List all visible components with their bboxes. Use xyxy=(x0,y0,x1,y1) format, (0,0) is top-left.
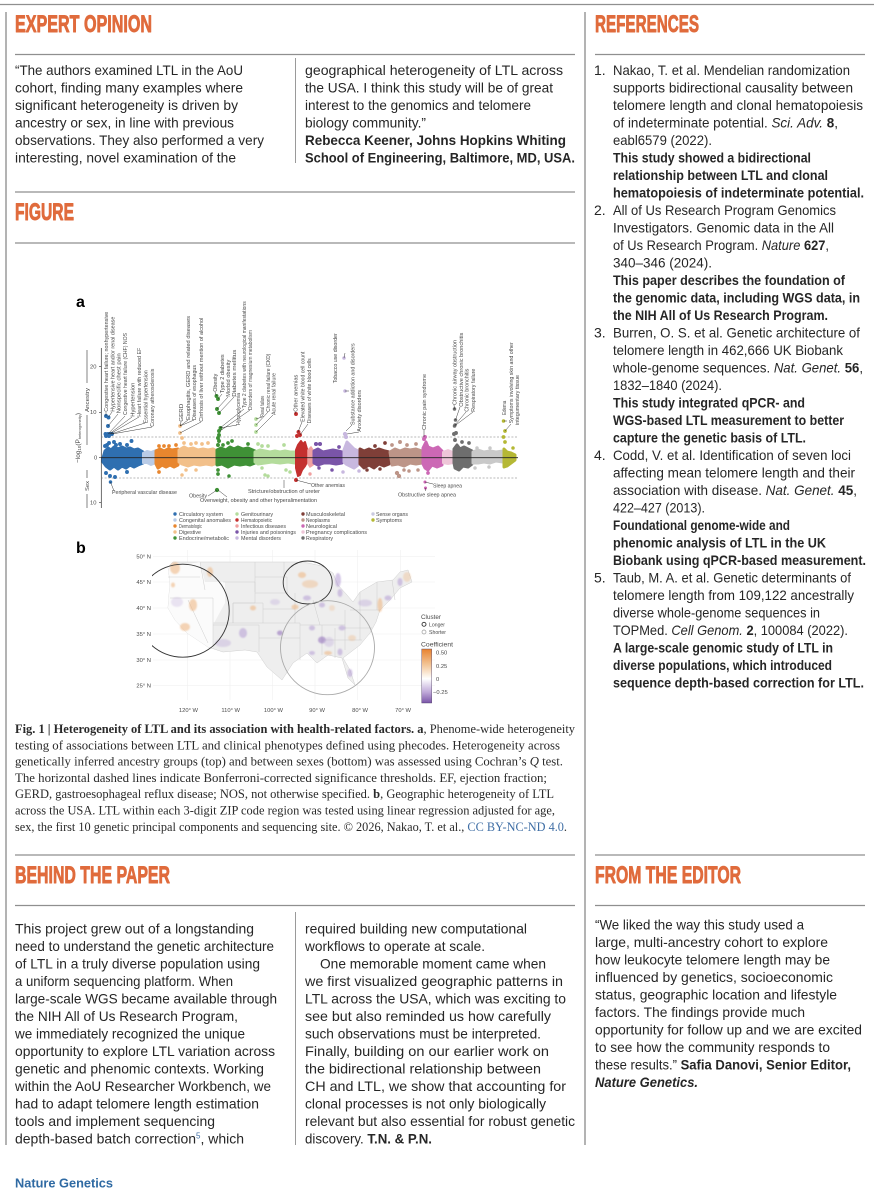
latitude and longitude labels: 90° W xyxy=(309,708,326,714)
text block: behind the paper body: One memorable moment came when xyxy=(320,956,546,972)
panel: from the editor xyxy=(595,855,865,1090)
endocrine points xyxy=(215,394,255,492)
y axis: 10 xyxy=(90,501,96,507)
figure caption: genetically inferred ancestry groups (top) and between sexes (bottom) was assessed using Cochran’s Q test. xyxy=(15,755,563,769)
y axis: Sex xyxy=(85,481,91,491)
reference list: Nakao, T. et al. Mendelian randomization xyxy=(613,62,850,78)
text block: editor quote: large, multi-ancestry cohort to explore xyxy=(595,934,828,950)
rotated phenotype labels: Other anemias xyxy=(294,375,300,412)
rotated phenotype labels: Diabetes mellitus xyxy=(232,350,238,397)
mental disorder points xyxy=(342,357,360,473)
text block: editor quote: factors. The findings provide much xyxy=(595,1004,805,1020)
text block: behind the paper body: clonal processes is not only biologically xyxy=(305,1096,546,1112)
lower phenotype labels: Obstructive sleep apnea xyxy=(398,492,457,498)
text block: expert quote: cohort, finding many examples where xyxy=(15,80,243,96)
legend: phecode categories: Hematopoietic xyxy=(241,518,272,524)
text block: behind the paper body: 5 xyxy=(196,1132,201,1140)
latitude and longitude labels: 100° W xyxy=(264,708,284,714)
latitude and longitude labels: 30° N xyxy=(136,658,151,664)
digestive points xyxy=(178,424,217,476)
text block: editor quote xyxy=(595,916,862,1090)
legend: phecode categories: Neoplasms xyxy=(306,518,330,524)
rotated phenotype labels: Disorders of magnesium metabolism xyxy=(248,330,254,410)
text block: behind the paper body: required building new computational xyxy=(305,920,527,936)
latitude and longitude labels: 50° N xyxy=(136,555,151,561)
legend: cluster: Longer xyxy=(429,622,445,628)
reference list: Taub, M. A. et al. Genetic determinants of xyxy=(613,570,851,586)
reference list: affecting mean telomere length and their xyxy=(613,464,855,480)
rotated phenotype labels: Chronic renal failure (CKD) xyxy=(266,354,272,412)
reference list: Codd, V. et al. Identification of seven loci xyxy=(613,447,851,463)
text block: behind the paper body: large-scale WGS became available through xyxy=(15,990,277,1006)
zero baseline xyxy=(101,457,518,459)
text block: expert quote: Rebecca Keener, Johns Hopkins Whiting xyxy=(305,132,566,148)
rotated phenotype labels: Respiratory failure xyxy=(471,369,477,412)
reference list: eabl6579 (2022). xyxy=(613,132,712,148)
text block: behind the paper body: opportunity to explore LTL variation across xyxy=(15,1043,275,1059)
legend: phecode categories: Neurological xyxy=(306,524,337,530)
lower phenotype labels: Obesity xyxy=(189,494,207,500)
text block: editor quote: opportunity for follow up and we are excited xyxy=(595,1022,862,1038)
reference list: Investigators. Genomic data in the All xyxy=(613,220,834,236)
rotated phenotype labels: Esophagitis, GERD and related diseases xyxy=(186,316,192,420)
reference list: relationship between LTL and clonal xyxy=(613,167,828,183)
rotated phenotype labels: Hypertensive heart and/or renal disease xyxy=(110,317,116,412)
musculoskeletal points xyxy=(360,442,389,471)
text block: expert quote: interest to the genomics and telomere xyxy=(305,97,531,113)
circulatory points xyxy=(103,414,143,483)
figure caption: across the USA. LTL within each 3-digit ZIP code region was tested using linear regression adjusted for age, xyxy=(15,804,555,818)
rotated phenotype labels xyxy=(104,301,521,432)
text block: expert quote: the USA. I think this study will be of great xyxy=(305,80,553,96)
reference list: phenomic analysis of LTL in the UK xyxy=(613,534,826,550)
text block: expert quote: interesting, novel examination of the xyxy=(15,150,236,166)
rotated phenotype labels: Type 2 diabetes with neurological manifestations xyxy=(242,301,248,408)
text block: editor quote: status, geographic location and lifestyle xyxy=(595,986,837,1002)
reference list: Burren, O. S. et al. Genetic architecture of xyxy=(613,324,860,340)
text block: behind the paper body: the bidirectional relationship between xyxy=(305,1060,541,1076)
reference list: 2. xyxy=(594,202,606,218)
y axis: 20 xyxy=(90,365,96,371)
coefficient patches xyxy=(170,562,411,677)
text block: behind the paper body: we immediately recognized the unique xyxy=(14,1026,245,1042)
heading: from the editor: FROM THE EDITOR xyxy=(595,862,741,889)
latitude and longitude labels: 120° W xyxy=(179,708,199,714)
text block: behind the paper body: within the AoU Researcher Workbench, we xyxy=(14,1078,271,1094)
lower phenotype labels: Peripheral vascular disease xyxy=(112,490,177,496)
rotated phenotype labels: Diseases of esophagus xyxy=(192,365,198,420)
legend: phecode categories: Injuries and poisonings xyxy=(241,530,296,536)
text block: editor quote: “We liked the way this study used a xyxy=(595,916,804,932)
reference list: association with disease. Nat. Genet. 45, xyxy=(613,482,857,498)
text block: behind the paper body: LTL across the USA, which was exciting to xyxy=(305,990,566,1006)
text block: expert quote: biology community.” xyxy=(305,114,426,130)
legend: phecode categories: Dermatologic xyxy=(179,524,202,530)
hematopoietic points xyxy=(294,412,307,482)
y axis xyxy=(75,348,101,508)
text block: behind the paper body: see but also reminded us how carefully xyxy=(305,1008,551,1024)
rotated phenotype labels: Congestive heart failure; nonhypertensive xyxy=(104,312,110,412)
latitude and longitude labels: 25° N xyxy=(136,684,151,690)
text block: editor quote: how leukocyte telomere length may be xyxy=(595,952,830,968)
lower phenotype labels: Sleep apnea xyxy=(433,484,463,490)
text block: behind the paper body: Finally, building on our earlier work on xyxy=(305,1043,549,1059)
y axis: 0 xyxy=(94,456,97,462)
text block: behind the paper body: This project grew out of a longstanding xyxy=(15,920,254,936)
map grid xyxy=(153,550,435,700)
text block: expert quote: ancestry or sex, in line with previous xyxy=(15,114,234,130)
legend: coefficient colour bar: Coefficient xyxy=(421,641,453,648)
heading: expert opinion: EXPERT OPINION xyxy=(15,11,152,38)
figure caption: Fig. 1 | Heterogeneity of LTL and its association with health-related factors. a, Phenome-wide heterogeneity xyxy=(15,722,576,736)
latitude and longitude labels: 80° W xyxy=(352,708,369,714)
text block: behind the paper body: the NIH All of Us Research Program, xyxy=(15,1008,238,1024)
reference list: diverse whole-genome sequences in xyxy=(613,604,820,620)
legend: phecode categories: Genitourinary xyxy=(241,512,273,518)
rotated phenotype labels: Anxiety disorders xyxy=(357,390,363,432)
y axis: −log xyxy=(75,451,82,463)
reference list: whole-genome sequences. Nat. Genet. 56, xyxy=(612,360,863,376)
state borders xyxy=(168,562,395,660)
text block: behind the paper body: genetic and phenomic contexts. Working xyxy=(15,1060,264,1076)
lower phenotype labels: Overweight, obesity and other hyperalimentation xyxy=(200,498,317,504)
legend: phecode categories: Sense organs xyxy=(376,512,408,518)
rotated phenotype labels: Coronary atherosclerosis xyxy=(150,369,156,427)
text block: behind the paper body: tools and implement sequencing xyxy=(15,1113,215,1129)
injuries points xyxy=(314,442,342,471)
rotated phenotype labels: Hypoglycemia xyxy=(236,392,242,425)
reference list: of indeterminate potential. Sci. Adv. 8, xyxy=(613,114,838,130)
reference list: capture the genetic basis of LTL. xyxy=(613,430,806,446)
legend: coefficient colour bar: −0.25 xyxy=(433,690,448,696)
cluster circles xyxy=(136,561,374,695)
rotated phenotype labels: Hypertension xyxy=(130,383,136,417)
heading: figure: FIGURE xyxy=(15,199,74,226)
reference list: A large-scale genomic study of LTL in xyxy=(613,640,833,656)
legend: phecode categories: Respiratory xyxy=(306,536,333,542)
map of contiguous USA xyxy=(168,562,412,685)
latitude and longitude labels: 40° N xyxy=(136,606,151,612)
threshold dashed lines xyxy=(101,437,518,478)
rotated phenotype labels: Essential hypertension xyxy=(143,370,149,423)
panel letter a: a xyxy=(76,294,85,311)
rotated phenotype labels: Substance addiction and disorders xyxy=(350,343,356,425)
rotated phenotype labels: integumentary tissue xyxy=(515,375,521,425)
y axis: Ancestry xyxy=(85,388,91,412)
rotated phenotype labels: Obesity xyxy=(213,374,219,392)
text block: expert quote xyxy=(15,62,575,166)
reference list: telomere length and clonal hematopoiesis xyxy=(613,97,863,113)
legend: coefficient colour bar xyxy=(421,641,453,703)
text block: behind the paper body: of LTL in a truly diverse population using xyxy=(15,956,260,972)
legend: coefficient colour bar: 0 xyxy=(436,677,439,683)
figure caption: testing of associations between LTL and clinical phenotypes defined using phecodes. Heterogeneity across xyxy=(15,738,560,752)
y axis: 10 xyxy=(90,410,96,416)
text block: behind the paper body: relevant but also essential for robust genetic xyxy=(305,1113,575,1129)
reference list: the NIH All of Us Research Program. xyxy=(613,307,828,323)
reference list: 340–346 (2024). xyxy=(613,254,712,270)
legend: coefficient colour bar: 0.50 xyxy=(436,650,447,656)
latitude and longitude labels: 110° W xyxy=(221,708,241,714)
legend: phecode categories xyxy=(173,512,408,542)
rotated phenotype labels: Symptoms involving skin and other xyxy=(509,342,515,423)
pregnancy points xyxy=(443,450,453,464)
rotated phenotype labels: Cirrhosis of liver without mention of alcohol xyxy=(199,318,205,422)
text block: behind the paper body xyxy=(14,920,575,1146)
reference list: supports bidirectional causality between xyxy=(613,80,853,96)
text block: expert quote: School of Engineering, Baltimore, MD, USA. xyxy=(305,150,575,166)
symptom points xyxy=(502,420,515,467)
footer: journal name: Nature Genetics xyxy=(15,1176,113,1190)
text block: behind the paper body: had to adapt telomere length estimation xyxy=(15,1096,259,1112)
text block: editor quote: to see how the community responds to xyxy=(595,1039,830,1055)
rotated phenotype labels: Nonspecific chest pain xyxy=(116,353,122,413)
text block: editor quote: influenced by genetics, socioeconomic xyxy=(595,969,833,985)
reference list: All of Us Research Program Genomics xyxy=(613,202,836,218)
text block: expert quote: observations. They also performed a very xyxy=(15,132,264,148)
infectious points xyxy=(308,447,313,467)
text block: behind the paper body: such observations must be interpreted. xyxy=(305,1026,541,1042)
text block: behind the paper body: we first visualized geographic patterns in xyxy=(304,973,563,989)
rotated phenotype labels: Chronic airway obstruction xyxy=(452,340,458,405)
rotated phenotype labels: Acute renal failure xyxy=(271,373,277,415)
reference list: telomere length in 462,666 UK Biobank xyxy=(613,342,844,358)
legend: cluster: Shorter xyxy=(429,630,446,636)
panel: figure a, phenome-wide Manhattan plot xyxy=(75,294,521,542)
reference list: diverse populations, which introduced xyxy=(613,657,832,673)
legend: phecode categories: Musculoskeletal xyxy=(306,512,345,518)
reference list: 5. xyxy=(594,570,606,586)
text block: expert quote: “The authors examined LTL in the AoU xyxy=(15,62,243,78)
legend: cluster: Cluster xyxy=(421,614,441,621)
figure caption: GERD, gastroesophageal reflux disease; NOS, not otherwise specified. b, Geographic heterogeneity of LTL xyxy=(15,787,554,801)
rotated phenotype labels: Type 2 diabetes xyxy=(220,354,226,393)
y axis: 10 xyxy=(77,445,82,451)
lower phenotype labels: Other anemias xyxy=(311,483,345,489)
text block: behind the paper body: CH and LTL, we show that accounting for xyxy=(305,1078,566,1094)
legend: coefficient colour bar: 0.25 xyxy=(436,664,447,670)
lower phenotype labels: Stricture/obstruction of ureter xyxy=(248,489,320,495)
sense organ points xyxy=(473,447,503,469)
reference list xyxy=(594,62,866,690)
heading: behind the paper: BEHIND THE PAPER xyxy=(15,862,170,889)
text block: expert quote: geographical heterogeneity of LTL across xyxy=(305,62,563,78)
rotated phenotype labels: GERD xyxy=(179,404,185,422)
panel: references xyxy=(594,11,866,690)
latitude and longitude labels: 70° W xyxy=(395,708,412,714)
legend: phecode categories: Congenital anomalies xyxy=(179,518,231,524)
latitude and longitude labels xyxy=(136,555,412,714)
panel: behind the paper xyxy=(14,855,575,1146)
reference list: of Us Research Program. Nature 627, xyxy=(613,237,829,253)
rotated phenotype labels: Chronic pain syndrome xyxy=(422,374,428,430)
legend: phecode categories: Mental disorders xyxy=(241,536,281,542)
text block: behind the paper body: depth-based batch correction xyxy=(15,1130,196,1146)
latitude and longitude labels: 45° N xyxy=(136,580,151,586)
legend: phecode categories: Symptoms xyxy=(376,518,402,524)
legend: phecode categories: Pregnancy complications xyxy=(306,530,367,536)
lower phenotype labels xyxy=(112,483,463,504)
reference list: WGS-based LTL measurement to better xyxy=(613,412,844,428)
legend: cluster xyxy=(421,614,446,636)
reference list: 3. xyxy=(594,324,606,340)
text block: editor quote: Nature Genetics. xyxy=(595,1074,698,1090)
reference list: This study showed a bidirectional xyxy=(613,150,811,166)
rotated phenotype labels: Elevated white blood cell count xyxy=(300,351,306,422)
panel: expert opinion xyxy=(15,11,575,166)
rotated phenotype labels: Congestive heart failure (CHF) NOS xyxy=(123,333,129,415)
panel letter b: b xyxy=(76,540,86,557)
panel: figure b, USA map xyxy=(76,540,453,714)
rotated phenotype labels: Heart failure with reduced EF xyxy=(137,347,143,417)
text block: behind the paper body: , which xyxy=(200,1130,244,1146)
rotated phenotype labels: Chronic bronchitis xyxy=(464,369,470,412)
reference list: 1832–1840 (2024). xyxy=(613,377,722,393)
figure caption: The horizontal dashed lines indicate Bonferroni-corrected significance thresholds. EF, ejection fraction; xyxy=(15,771,547,785)
heading: references: REFERENCES xyxy=(595,11,699,38)
lighter west region xyxy=(168,562,225,648)
neoplasm points xyxy=(390,440,422,478)
reference list: telomere length from 109,122 ancestrally xyxy=(613,587,854,603)
rotated phenotype labels: Diseases of white blood cells xyxy=(307,358,313,423)
congenital points xyxy=(143,450,156,465)
rotated phenotype labels: Renal failure xyxy=(260,396,266,417)
text block: behind the paper body: discovery. T.N. & P.N. xyxy=(305,1130,432,1146)
dermatologic points xyxy=(156,444,178,474)
text block: expert quote: significant heterogeneity is driven by xyxy=(15,97,238,113)
legend: phecode categories: Digestive xyxy=(179,530,201,536)
reference list: This study integrated qPCR- and xyxy=(613,394,805,410)
latitude and longitude labels: 35° N xyxy=(136,632,151,638)
leader lines xyxy=(106,353,511,497)
text block: editor quote: these results.” Safia Danovi, Senior Editor, xyxy=(595,1056,851,1072)
reference list: 1. xyxy=(594,62,606,78)
y axis: ) xyxy=(75,413,82,415)
reference list: Foundational genome-wide and xyxy=(613,517,790,533)
neurological points xyxy=(422,435,442,489)
reference list: This paper describes the foundation of xyxy=(613,272,845,288)
legend: phecode categories: Endocrine/metabolic xyxy=(179,536,229,542)
respiratory points xyxy=(452,408,472,470)
y axis: heterogeneity xyxy=(77,415,82,439)
reference list: 422–427 (2013). xyxy=(613,500,705,516)
legend: phecode categories: Infectious diseases xyxy=(241,524,286,530)
figure caption xyxy=(15,722,576,834)
reference list: 4. xyxy=(594,447,606,463)
reference list: TOPMed. Cell Genom. 2, 100084 (2022). xyxy=(613,622,848,638)
legend: phecode categories: Circulatory system xyxy=(179,512,223,518)
y axis: (P xyxy=(75,439,82,446)
text block: behind the paper body: workflows to operate at scale. xyxy=(304,938,485,954)
rotated phenotype labels: Tobacco use disorder xyxy=(333,333,339,383)
figure caption: sex, the first 10 genetic principal components and sequencing site. © 2026, Nakao, T. et al., CC BY-NC-ND 4.0. xyxy=(15,820,567,834)
text block: behind the paper body: need to understand the genetic architecture xyxy=(15,938,274,954)
genitourinary points xyxy=(254,418,295,477)
rotated phenotype labels: Edema xyxy=(502,400,508,415)
rotated phenotype labels: Morbid obesity xyxy=(226,360,232,397)
rotated phenotype labels: Obstructive chronic bronchitis xyxy=(459,333,465,407)
text block: behind the paper body: a uniform sequencing platform. When xyxy=(15,973,233,989)
